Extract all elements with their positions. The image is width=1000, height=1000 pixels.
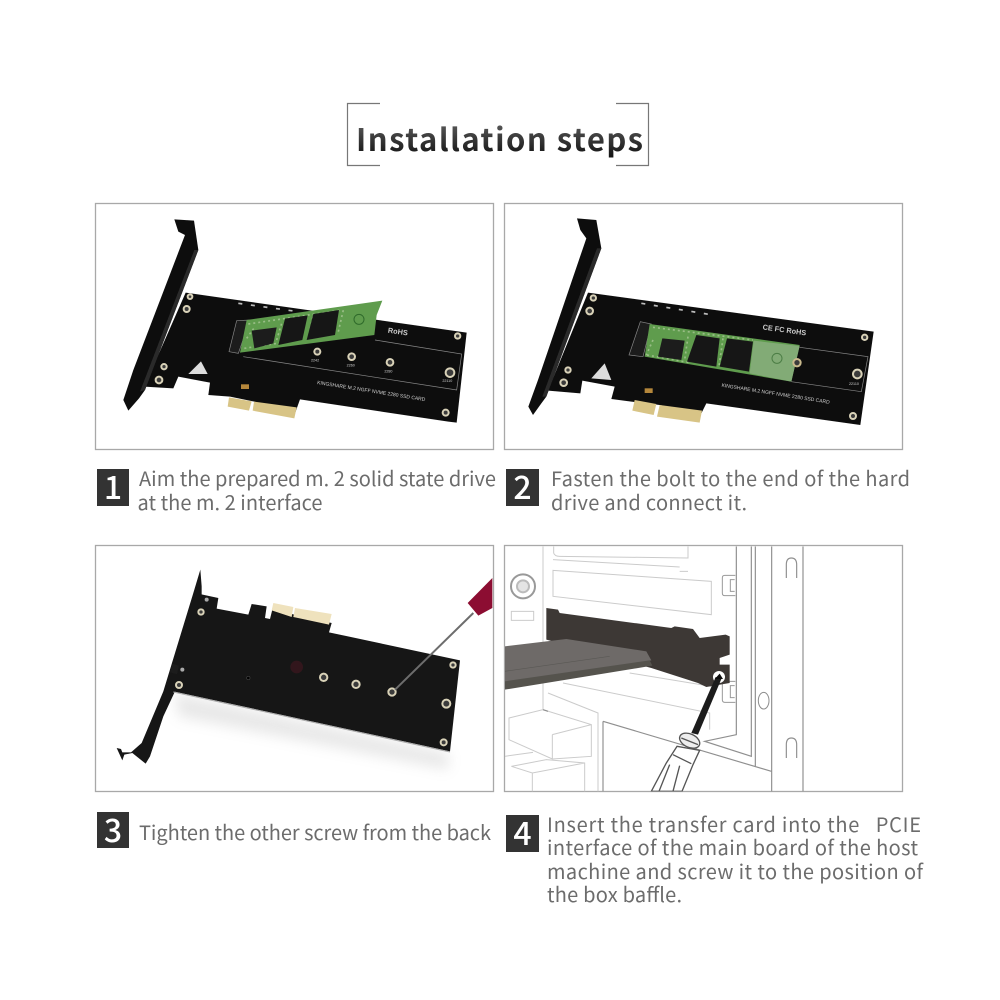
step 4 caption: machine and screw it to the position of — [547, 856, 924, 885]
board — [548, 293, 874, 425]
dark bracket — [546, 608, 730, 687]
step 1 caption: Aim the prepared m. 2 solid state drive — [139, 463, 496, 492]
step 3 caption — [97, 806, 491, 852]
step 1 caption: 1 — [104, 463, 122, 509]
step 2 caption: drive and connect it. — [551, 487, 747, 516]
screwdriver — [395, 613, 473, 690]
step 2 caption — [506, 463, 910, 516]
step 4 caption: Insert the transfer card into the PCIE — [547, 809, 921, 838]
panel: step 2 photo: 22110 — [849, 382, 859, 386]
panel: step 1 photo: 2260 — [347, 364, 355, 368]
panel: step 1 photo: 2280 — [384, 370, 392, 374]
panel: step 1 photo: 2242 — [311, 358, 319, 362]
panel: step 2 photo — [504, 204, 902, 450]
M.2 SSD — [629, 322, 651, 357]
panel: step 1 photo: 22110 — [442, 379, 452, 383]
step 3 caption: Tighten the other screw from the back — [139, 817, 491, 846]
step 4 caption — [506, 809, 924, 908]
bracket — [117, 570, 202, 764]
panel: step 1 photo: KINGSHARE M.2 NGFF NVME 2280 SSD CARD — [317, 380, 426, 403]
bracket — [123, 219, 198, 411]
panel: step 1 photo: RoHS — [387, 326, 409, 337]
step 4 caption: the box baffle. — [547, 879, 682, 908]
title — [348, 104, 648, 166]
step 2 caption: Fasten the bolt to the end of the hard — [551, 463, 910, 492]
step 1 caption: at the m. 2 interface — [138, 487, 322, 516]
panel: step 2 photo: CE FC RoHS — [762, 322, 807, 337]
gold fingers — [228, 397, 252, 411]
card — [505, 639, 651, 683]
board — [144, 293, 467, 423]
panel: step 4 line drawing — [504, 546, 902, 792]
step 2 caption: 2 — [513, 463, 532, 509]
panel: step 1 photo — [96, 204, 494, 450]
gold fingers — [632, 400, 656, 415]
bracket — [528, 218, 601, 415]
panel: step 3 photo — [96, 546, 494, 792]
step 4 caption: interface of the main board of the host — [547, 832, 918, 861]
step 1 caption — [97, 463, 496, 516]
bracket tabs — [170, 594, 212, 677]
step 3 caption: 3 — [104, 806, 122, 852]
step 4 caption: 4 — [513, 809, 532, 855]
gold fingers — [272, 603, 293, 617]
panel: step 2 photo: KINGSHARE M.2 NGFF NVME 2280 SSD CARD — [721, 383, 830, 406]
screwdriver — [691, 677, 721, 735]
board — [173, 593, 460, 751]
M.2 SSD — [229, 320, 250, 353]
title: Installation steps — [356, 115, 643, 160]
soft shadow — [175, 693, 448, 770]
